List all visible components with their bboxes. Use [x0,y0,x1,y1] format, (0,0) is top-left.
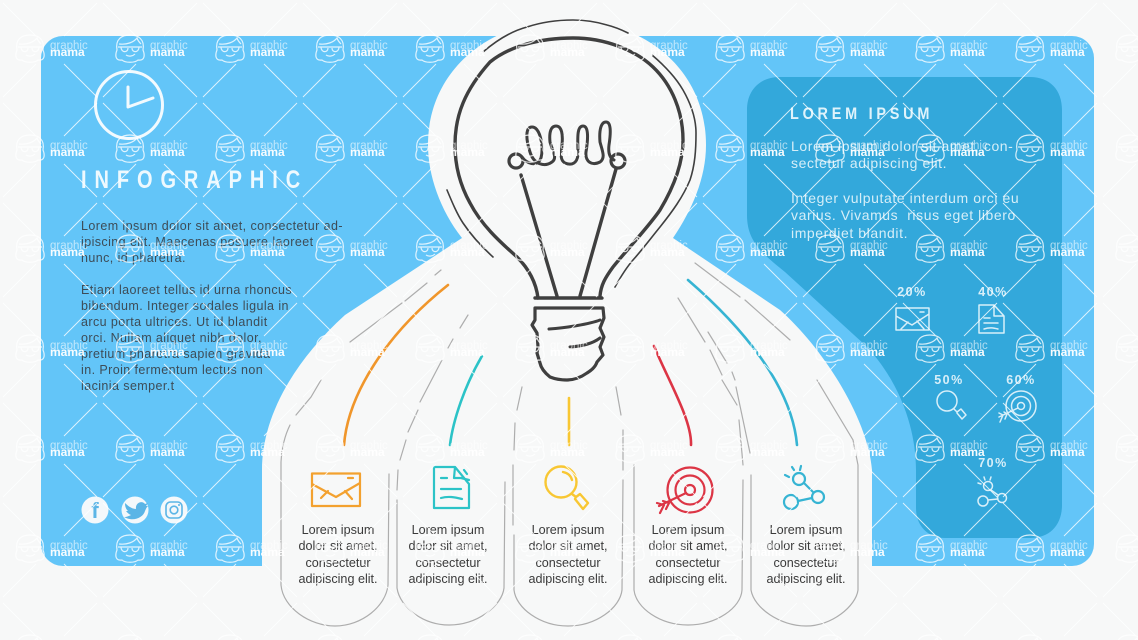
text block: left intro: nunc, id pharetra. [81,251,186,265]
text block: left intro: Etiam laoreet tellus id urna rhoncus [81,283,292,297]
card 4 text: dolor sit amet, [648,539,728,553]
card 3 text [528,523,608,586]
card 1 text: dolor sit amet, [298,539,378,553]
heading: lorem ipsum: LOREM IPSUM [790,105,929,123]
teal connector [450,356,482,445]
stat: 70% [978,456,1008,506]
card 2 text: dolor sit amet, [408,539,488,553]
icon: instagram [160,496,188,524]
text block: left intro: ipiscing elit. Maecenas posuere laoreet [81,235,314,249]
stat: 70%: 70% [978,456,1008,470]
card 3 text: dolor sit amet, [528,539,608,553]
stat: 20% [896,285,929,330]
card 5 text [766,523,846,586]
icon: document [434,467,469,508]
card 3 text: adipiscing elit. [528,572,608,586]
icon: magnifier [546,466,588,509]
card 4 text: Lorem ipsum [652,523,724,537]
yellow connector [568,398,570,445]
card 2 text: adipiscing elit. [408,572,488,586]
card 1 text [298,523,378,586]
text block: right description: Lorem ipsum dolor sit amet, con- [791,138,1013,154]
text block: left intro: Lorem ipsum dolor sit amet, consectetur ad- [81,219,343,233]
card 5 outline [695,263,858,626]
card 2 text: consectetur [415,556,481,570]
text block: left intro: in. Proin fermentum lectus non [81,363,263,377]
text block: left intro: arcu porta ultrices. Ut id blandit [81,315,268,329]
text block: right description: varius. Vivamus risus eget libero [791,207,1016,223]
text block: left intro: orci. Nullam aliquet nibh dolor, [81,331,262,345]
text block: left intro: lacinia semper.t [81,379,175,393]
card 2 text: Lorem ipsum [412,523,484,537]
stat: 50%: 50% [934,373,964,387]
icon: clock [96,72,162,138]
stat: 20%: 20% [897,285,927,299]
text block: right description: imperdiet blandit. [791,225,908,241]
card outlines [281,263,858,626]
card 4 text [648,523,728,586]
social icons [82,496,188,524]
stat: 60% [999,373,1036,422]
panel: white bulb silhouette with fan body [262,20,872,567]
red connector [654,346,691,445]
icon: target [657,468,712,513]
card 1 text: adipiscing elit. [298,572,378,586]
card 1 text: Lorem ipsum [302,523,374,537]
card 2 text [408,523,488,586]
card 1 text: consectetur [305,556,371,570]
text block: left intro: bibendum. Integer sodales ligula in [81,299,289,313]
icon: twitter [122,496,148,524]
text block: right description: sectetur adipiscing elit. [791,155,947,171]
text block: left intro: pretium pharetra sapien gravida [81,347,271,361]
stat: 60%: 60% [1006,373,1036,387]
title: INFOGRAPHIC [81,166,300,194]
blue connector [688,280,797,445]
text block: right description: Integer vulputate interdum orci eu [791,190,1019,206]
text block: left intro [81,219,343,393]
icon: facebook: f [91,498,99,523]
card 4 outline [634,298,743,625]
stat: 40%: 40% [978,285,1008,299]
card 5 text: dolor sit amet, [766,539,846,553]
card 4 text: consectetur [655,556,721,570]
card 3 text: consectetur [535,556,601,570]
card 5 text: adipiscing elit. [766,572,846,586]
card 5 text: Lorem ipsum [770,523,842,537]
icon: network [784,466,824,509]
card 4 text: adipiscing elit. [648,572,728,586]
orange connector [344,285,448,445]
stat: 40% [978,285,1008,333]
card 2 outline [397,315,505,625]
card 3 text: Lorem ipsum [532,523,604,537]
panel: dark blue stats [747,77,1062,538]
background panel: blue [41,36,1094,566]
icon: light bulb [447,20,696,380]
card 3 outline [513,387,623,626]
stat: 50% [934,373,966,419]
card 1 outline [281,270,441,626]
card 5 text: consectetur [773,556,839,570]
icon: envelope [312,474,360,506]
text block: right description [791,138,1019,241]
